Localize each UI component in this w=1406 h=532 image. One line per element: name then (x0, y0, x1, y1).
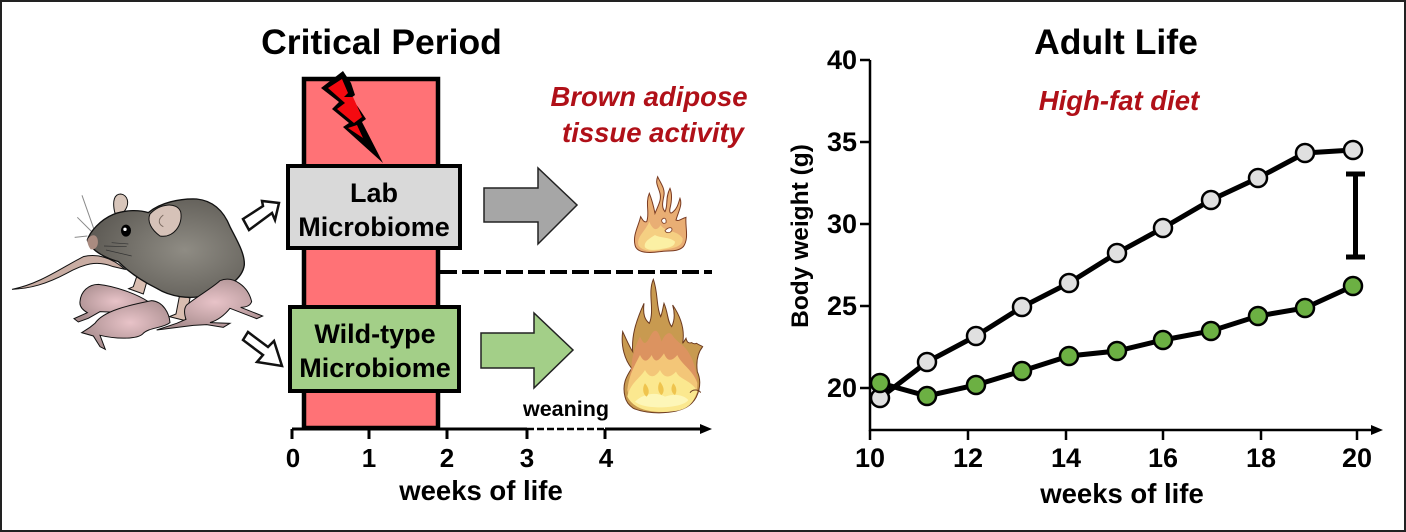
box: Wild-type Microbiome: Wild-type (314, 319, 436, 349)
box: Wild-type Microbiome (290, 307, 459, 391)
icon: lightning bolt (321, 71, 383, 163)
title: Adult Life: Adult Life (1034, 22, 1198, 62)
label: Brown adipose tissue activity (550, 81, 748, 148)
x tick labels (855, 443, 1372, 473)
timeline axis: 4 (599, 443, 614, 473)
box: Wild-type Microbiome: Microbiome (299, 353, 451, 383)
timeline axis: 1 (362, 443, 376, 473)
critical period bar (304, 79, 438, 428)
timeline axis: 3 (520, 443, 534, 473)
box: Lab Microbiome: Microbiome (298, 212, 450, 242)
icon: mother mouse with pups (12, 194, 263, 349)
tail (12, 256, 125, 289)
label: weaning: weaning (522, 397, 609, 421)
series: lab microbiome (871, 141, 1362, 407)
title: Critical Period: Critical Period (261, 22, 502, 62)
icon: small flame (634, 177, 687, 253)
x tick labels: 10 (855, 443, 885, 473)
x tick labels: 20 (1342, 443, 1372, 473)
y tick labels: 30 (827, 209, 857, 239)
rear ear (114, 194, 128, 213)
box: Lab Microbiome (288, 166, 460, 248)
x tick labels: 12 (953, 443, 983, 473)
timeline axis: 0 (286, 443, 300, 473)
arrow: white to wild-type (243, 332, 282, 366)
x tick labels: 18 (1246, 443, 1276, 473)
arrow: gray (484, 168, 577, 244)
timeline axis (286, 424, 712, 473)
y tick labels: 25 (827, 291, 857, 321)
eye (121, 225, 131, 237)
body (87, 199, 244, 297)
icon: large flame (622, 279, 703, 413)
timeline axis: 2 (440, 443, 454, 473)
label: Brown adipose tissue activity: tissue activity (562, 117, 746, 148)
x tick labels: 14 (1051, 443, 1081, 473)
arrow: green (481, 313, 573, 388)
ear (149, 205, 181, 236)
error bar (1346, 174, 1365, 257)
y tick labels: 35 (827, 127, 857, 157)
x axis title: weeks of life (1039, 478, 1204, 509)
axes (860, 60, 1383, 440)
y axis title: Body weight (g) (787, 144, 814, 328)
pups (74, 284, 150, 322)
series: wild-type microbiome (871, 277, 1362, 405)
y tick labels (827, 45, 857, 403)
line chart: body weight (787, 45, 1383, 509)
arrow: white to lab (243, 201, 279, 230)
x tick labels: 16 (1148, 443, 1178, 473)
whiskers (75, 195, 94, 237)
divider: dashed line (440, 270, 712, 274)
label: weeks of life: weeks of life (398, 475, 563, 506)
label: High-fat diet: High-fat diet (1039, 85, 1201, 116)
y tick labels: 20 (827, 373, 857, 403)
y tick labels: 40 (827, 45, 857, 75)
box: Lab Microbiome: Lab (350, 178, 398, 208)
label: Brown adipose tissue activity: Brown adipose (550, 81, 748, 112)
front and hind legs (129, 277, 147, 294)
